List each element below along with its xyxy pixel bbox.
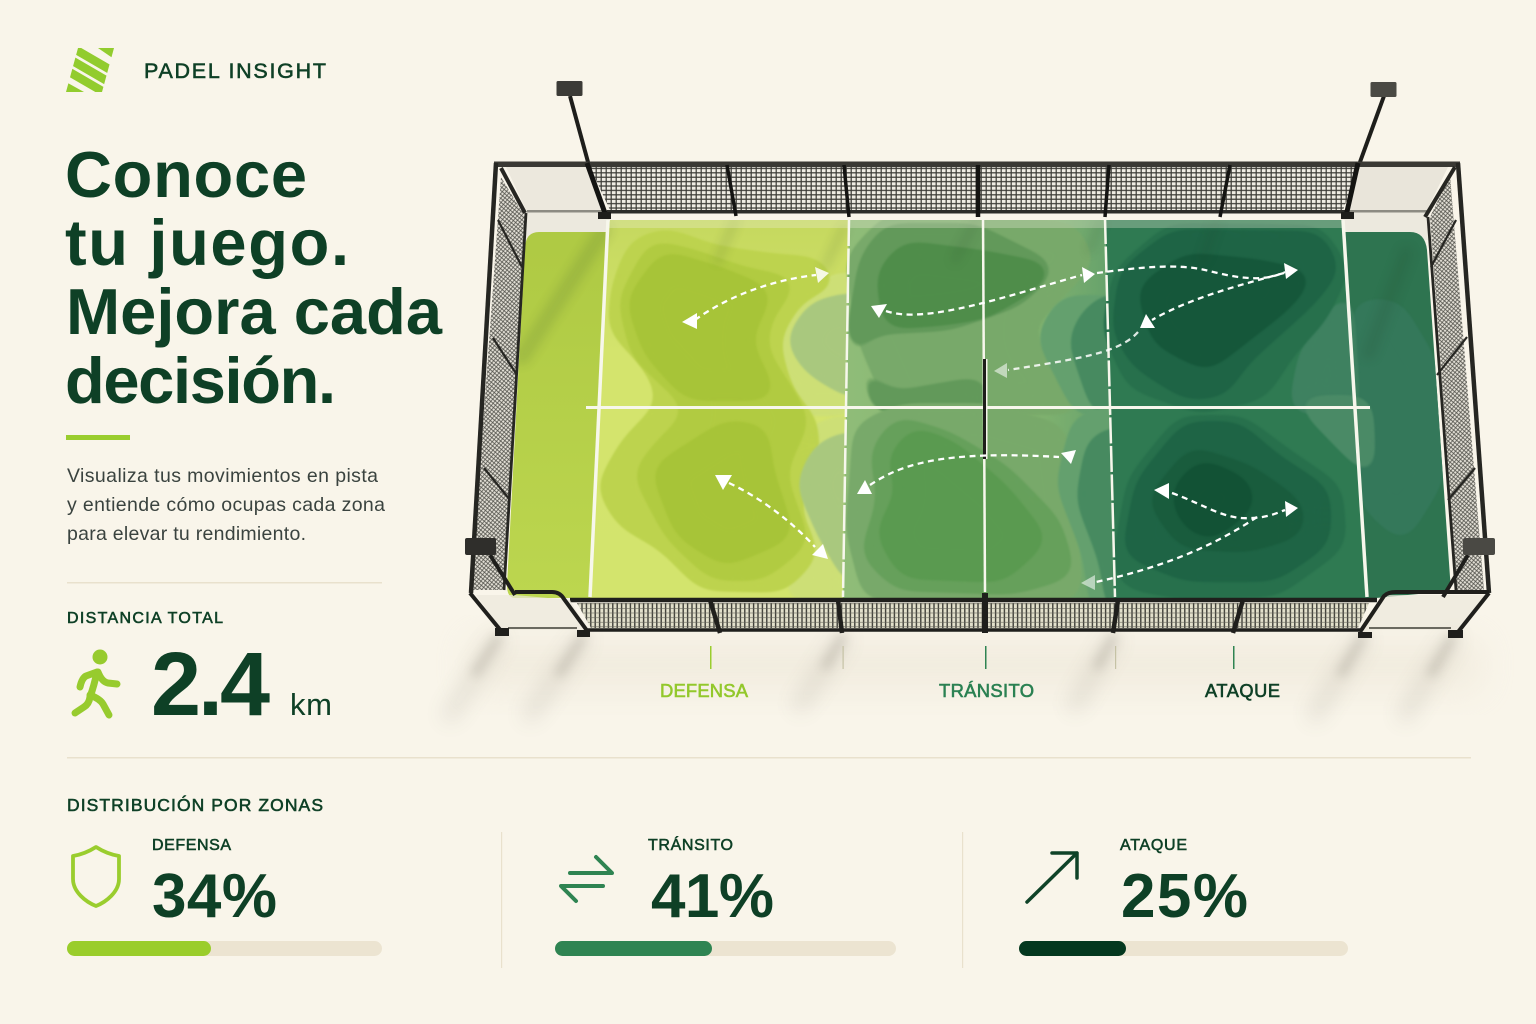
intro text	[67, 465, 385, 545]
title: Mejora cada	[66, 275, 443, 348]
intro text: Visualiza tus movimientos en pista	[67, 465, 378, 487]
label: DEFENSA	[152, 837, 231, 854]
court floor heatmap	[495, 214, 1470, 615]
panel: transito	[555, 835, 896, 956]
zone label: defensa: DEFENSA	[660, 680, 749, 701]
front fence	[570, 593, 1377, 633]
light poles (back)	[556, 81, 1396, 162]
icon: exchange arrows	[561, 857, 612, 901]
padel court illustration	[450, 81, 1495, 715]
net	[983, 359, 988, 459]
logo	[66, 48, 114, 92]
icon: up-right arrow	[1027, 853, 1077, 902]
top glass fade	[609, 220, 1342, 228]
label: ATAQUE	[1120, 837, 1187, 854]
front left corner	[465, 538, 590, 637]
stat label: DISTANCIA TOTAL	[67, 610, 223, 627]
section heading: DISTRIBUCIÓN POR ZONAS	[67, 794, 323, 815]
label: TRÁNSITO	[648, 835, 733, 854]
left fence	[471, 163, 526, 593]
right fence	[1425, 163, 1489, 593]
back fence	[494, 162, 1460, 219]
zone: defensa	[507, 220, 848, 598]
icon: walking person	[75, 650, 117, 715]
panel: defensa	[67, 837, 382, 956]
court ground shadow	[450, 638, 1480, 715]
movement arrows	[682, 263, 1298, 590]
value: 41%	[651, 862, 774, 931]
panel: ataque	[1019, 837, 1348, 956]
value: 25%	[1121, 862, 1248, 931]
intro text: y entiende cómo ocupas cada zona	[67, 494, 385, 516]
back corner glass panels	[506, 167, 1448, 240]
fence shadows on floor	[519, 225, 847, 364]
stat: distancia total	[67, 610, 332, 735]
progress bar	[1019, 941, 1348, 956]
zone label: ataque: ATAQUE	[1205, 681, 1280, 701]
title: decisión.	[65, 344, 336, 417]
zone label: transito: TRÁNSITO	[939, 680, 1034, 701]
zone: transito	[843, 220, 1115, 598]
title	[65, 138, 443, 417]
stat unit: km	[290, 687, 332, 722]
value: 34%	[152, 862, 277, 931]
intro text: para elevar tu rendimiento.	[67, 523, 306, 545]
zone label: ataque	[1205, 646, 1280, 701]
progress bar	[67, 941, 382, 956]
title: tu juego.	[65, 206, 349, 279]
zone label: transito	[939, 646, 1034, 701]
zone: ataque	[1102, 215, 1470, 605]
stat value: 2.4	[151, 635, 270, 735]
accent rule	[66, 435, 130, 440]
zone label: defensa	[660, 646, 749, 701]
brand name: PADEL INSIGHT	[144, 59, 326, 83]
icon: shield	[73, 847, 119, 906]
title: Conoce	[65, 138, 307, 211]
court lines	[586, 217, 1370, 597]
progress bar	[555, 941, 896, 956]
front right corner	[1358, 538, 1495, 638]
